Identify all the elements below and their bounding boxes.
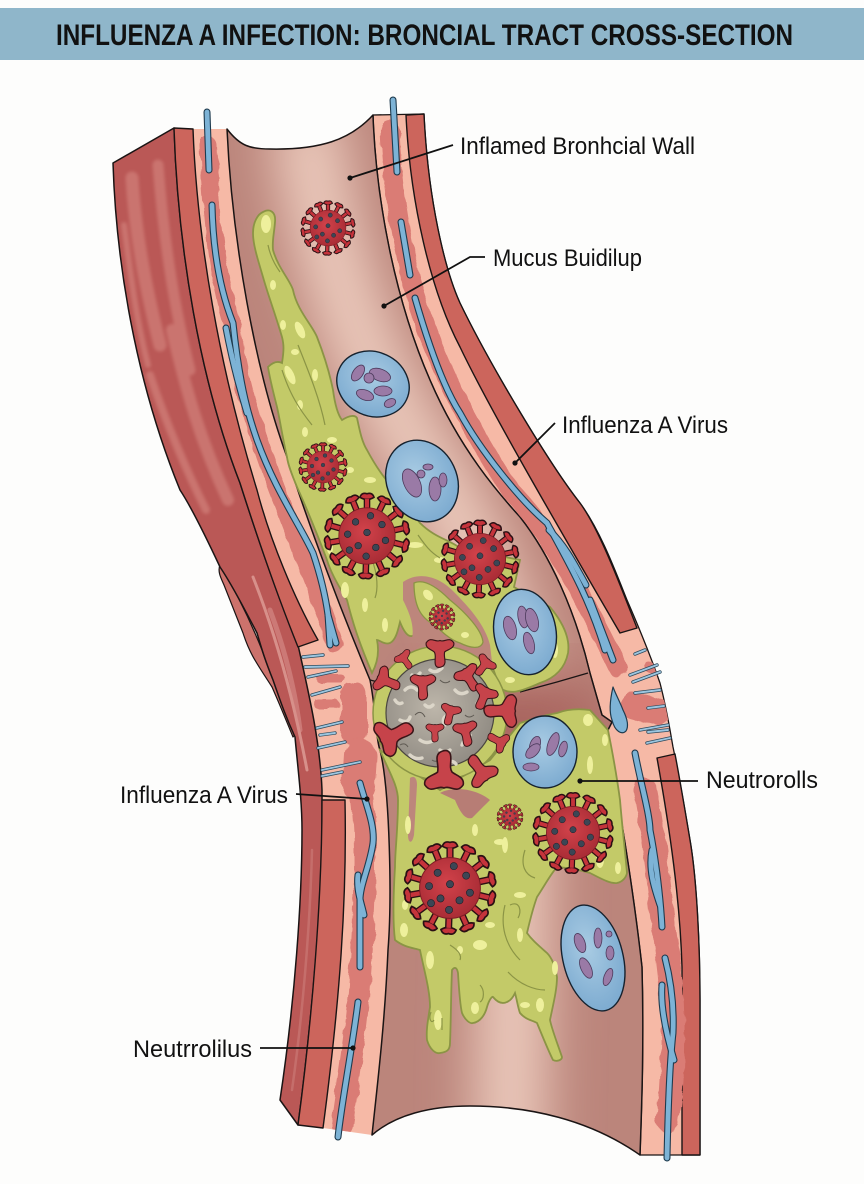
wall flap: [219, 565, 297, 737]
virus large left: [324, 493, 410, 579]
immune cell E: [551, 898, 635, 1018]
lumen gap in mucus: [403, 576, 492, 662]
red muscle band, left upper: [174, 128, 318, 647]
title banner: [0, 8, 864, 60]
immune cell C: [487, 584, 563, 680]
label: Inflamed Bronchial Wall: Inflamed Bronhcial Wall: [460, 133, 695, 160]
virus medium right: [441, 520, 519, 598]
red muscle band, left lower: [298, 800, 345, 1128]
outer muscular wall, left: [113, 128, 322, 1125]
label: Mucus Buildup: Mucus Buidilup: [493, 245, 642, 272]
inner lumen: [228, 117, 642, 1154]
virus tiny: [429, 604, 455, 630]
virus medium lower right: [532, 793, 614, 873]
tissue patches, right: [390, 130, 673, 1120]
label: Influenza A Virus, right: Influenza A Virus: [562, 412, 728, 439]
lumen outline: [227, 115, 643, 1155]
label: Mucus Buildup: [381, 245, 642, 309]
mucus buildup, upper: [253, 210, 568, 692]
blood vessels dark outline: [207, 100, 674, 1158]
junction hair lines, left: [303, 655, 360, 776]
virus small in mucus: [298, 443, 348, 491]
label: Neutrorolls: Neutrorolls: [706, 767, 818, 794]
virus tiny lower: [497, 804, 523, 830]
red muscle band, right upper: [406, 114, 637, 633]
lumen gap strip: [408, 777, 417, 842]
pink connective tissue, right: [373, 114, 700, 1155]
blood vessels blue fill: [207, 100, 674, 1158]
immune cell B: [373, 428, 471, 534]
lumen gap notch: [440, 789, 490, 818]
tissue patches, left: [208, 145, 365, 1125]
label: Influenza A Virus, right: [512, 412, 728, 466]
label: Inflamed Bronchial Wall: [347, 133, 695, 181]
virus in lumen, top: [300, 201, 355, 255]
vessel drop at wall notch: [610, 687, 627, 733]
immune cell D: [513, 716, 577, 788]
bronchial tube cross-section: [113, 100, 700, 1170]
label: Neutrrolilus: [133, 1036, 356, 1063]
mucus island: [414, 582, 483, 647]
label: Neutrrolilus: Neutrrolilus: [133, 1036, 252, 1063]
label: Neutrorolls: [577, 767, 818, 794]
red muscle band, right lower: [657, 754, 700, 1155]
label: Influenza A Virus, left: Influenza A Virus: [120, 782, 288, 809]
mucus buildup, lower: [380, 709, 627, 1061]
immune cell A: [326, 339, 420, 429]
infected gray cell with red spikes: [371, 640, 517, 790]
pink connective tissue, left: [193, 129, 390, 1135]
virus large lower left: [403, 842, 497, 934]
junction hair lines, right: [630, 650, 670, 743]
wall crease lines: [370, 673, 588, 692]
